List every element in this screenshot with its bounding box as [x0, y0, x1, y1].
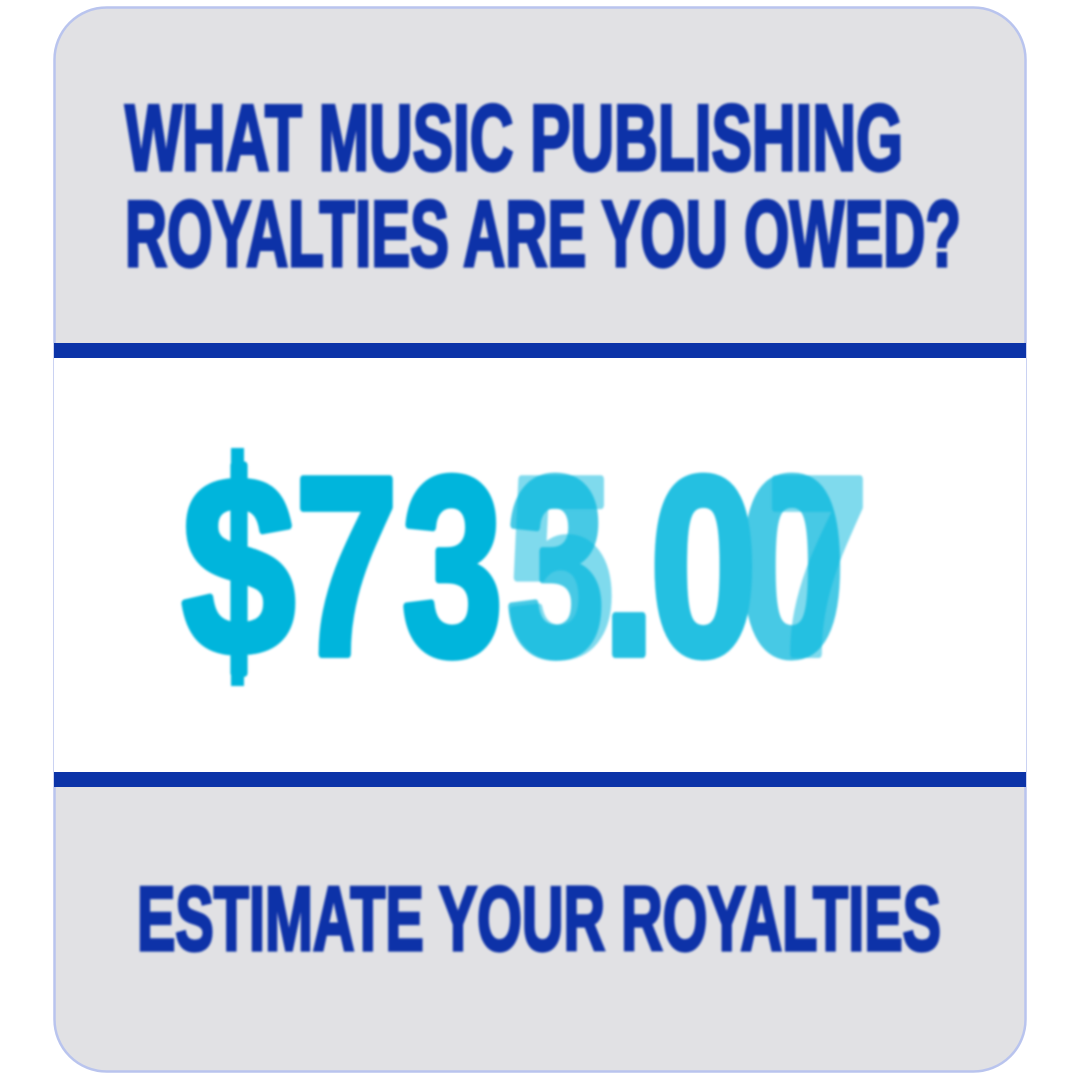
royalty amount counter: $	[182, 424, 295, 708]
royalty amount counter: 0	[650, 424, 757, 708]
heading	[125, 85, 961, 286]
top rule	[54, 343, 1026, 358]
royalty amount counter: 3	[507, 424, 605, 708]
royalty amount counter: .	[602, 424, 656, 708]
royalty amount counter: 0	[650, 424, 757, 708]
royalty amount counter: 7	[295, 424, 398, 708]
royalty amount counter: 7	[767, 424, 868, 708]
royalty amount counter: 3	[402, 424, 503, 708]
royalty amount counter: 0	[739, 424, 845, 708]
royalty amount counter	[182, 424, 868, 708]
royalty amount counter: 5	[507, 424, 614, 708]
bottom rule	[54, 772, 1026, 787]
royalty amount counter: .	[602, 424, 656, 708]
panel: white amount band	[54, 350, 1026, 780]
